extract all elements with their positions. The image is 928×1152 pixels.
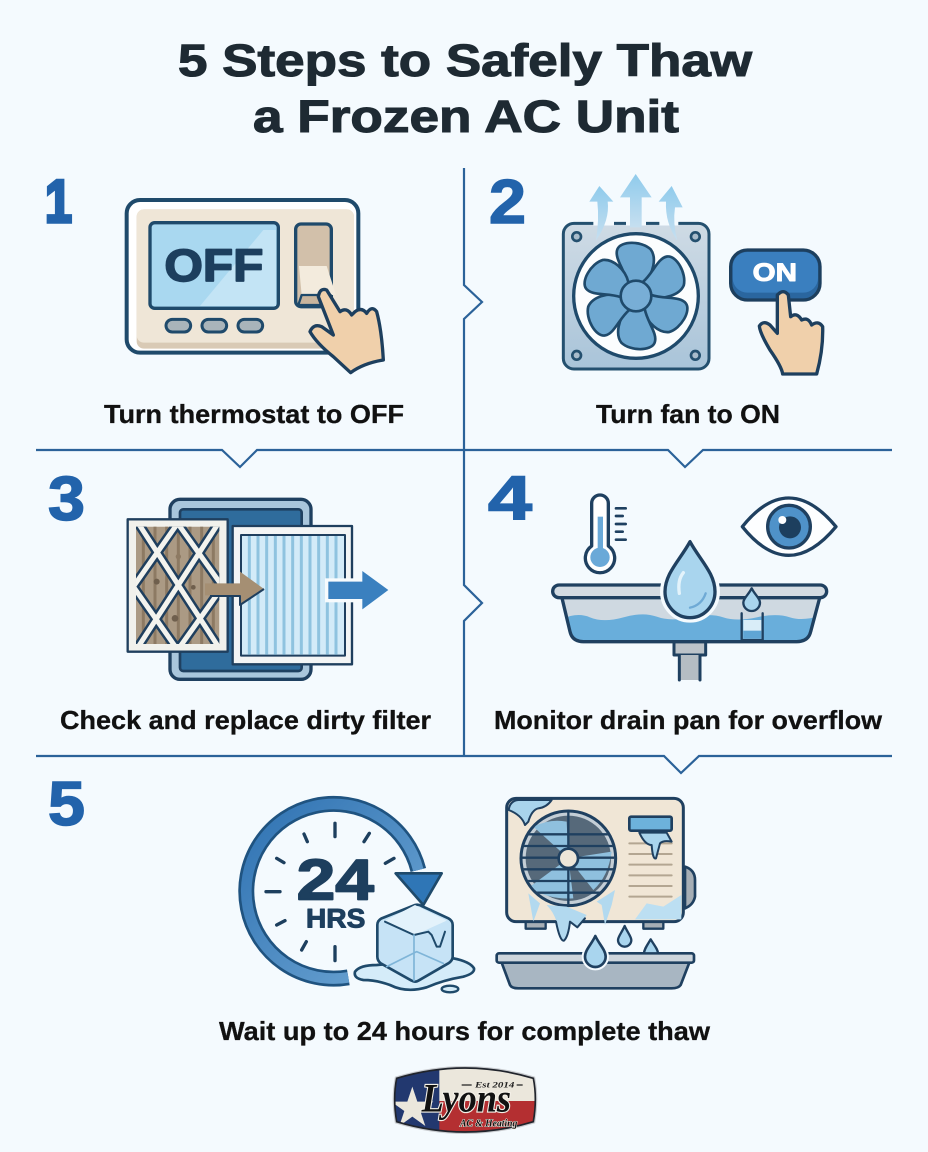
panel: step 2 bbox=[489, 168, 823, 429]
caption: Turn thermostat to OFF bbox=[104, 399, 404, 429]
icon: 24 hour clock with melting ice: HRS bbox=[306, 903, 365, 933]
icon: air filter swap bbox=[128, 499, 388, 679]
icon: drain pan with thermometer and eye bbox=[553, 495, 836, 680]
logo: Lyons AC and Heating badge bbox=[392, 1066, 538, 1134]
panel: step 4 bbox=[488, 464, 883, 735]
caption: Turn fan to ON bbox=[596, 399, 780, 429]
step number 1: 1 bbox=[45, 168, 72, 235]
caption: Check and replace dirty filter bbox=[60, 705, 431, 735]
step number 5: 5 bbox=[48, 770, 85, 839]
logo: Lyons AC and Heating badge: AC & Heating bbox=[459, 1118, 517, 1129]
step number 3: 3 bbox=[48, 465, 85, 534]
panel: step 3 bbox=[48, 465, 431, 735]
caption: Wait up to 24 hours for complete thaw bbox=[219, 1016, 711, 1046]
title bbox=[178, 35, 753, 142]
icon: melting outdoor AC unit bbox=[497, 798, 695, 988]
title: 5 Steps to Safely Thaw bbox=[178, 35, 753, 86]
step number 2: 2 bbox=[489, 168, 526, 237]
24 HRS label: 24 bbox=[297, 848, 374, 912]
ON label: ON bbox=[753, 259, 797, 287]
logo: Lyons AC and Heating badge: Lyons bbox=[421, 1076, 511, 1121]
icon: thermostat with hand bbox=[127, 200, 383, 373]
panel: step 1 bbox=[45, 168, 404, 429]
OFF label: OFF bbox=[164, 240, 263, 291]
icon: fan with ON button bbox=[563, 174, 823, 374]
title: a Frozen AC Unit bbox=[253, 91, 679, 142]
step number 4: 4 bbox=[488, 464, 533, 533]
logo: Lyons AC and Heating badge: Est 2014 bbox=[474, 1080, 515, 1090]
caption: Monitor drain pan for overflow bbox=[494, 705, 883, 735]
panel: step 5 bbox=[48, 770, 711, 1046]
icon: 24 hour clock with melting ice bbox=[246, 804, 474, 992]
